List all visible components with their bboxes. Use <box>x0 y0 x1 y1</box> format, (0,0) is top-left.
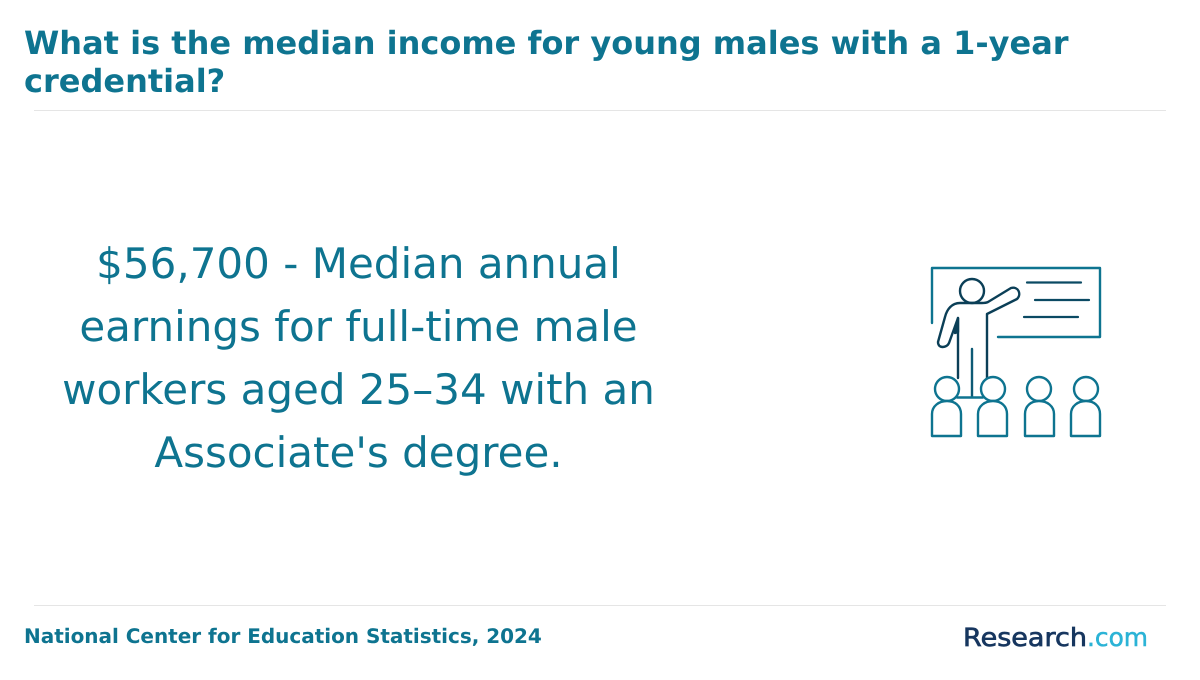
icon: students <box>932 377 1100 436</box>
logo: Research.com: .com <box>1087 623 1148 652</box>
icon: teacher figure <box>938 279 1019 398</box>
icon: board text lines <box>1024 282 1089 317</box>
logo: Research.com: Research <box>963 623 1087 652</box>
title: What is the median income for young males with a 1-year credential? <box>24 24 1069 100</box>
main statistic text: $56,700 - Median annual earnings for full-time male workers aged 25–34 with an Associate's degree. <box>62 239 655 477</box>
icon: presentation board <box>932 268 1100 337</box>
source citation: National Center for Education Statistics, 2024 <box>24 624 542 648</box>
logo: Research.com <box>963 623 1148 652</box>
